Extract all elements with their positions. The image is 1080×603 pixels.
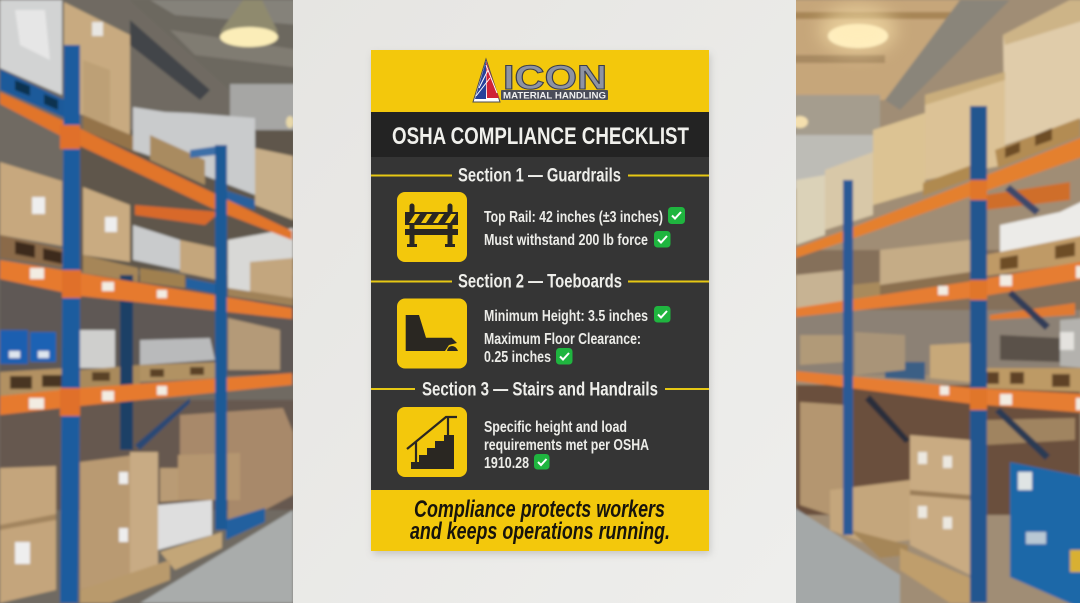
third tier goods (978, 368, 1080, 392)
second tier boxes (0, 162, 62, 246)
uprights (843, 180, 853, 535)
check badge (556, 348, 572, 364)
section 3 checklist (484, 419, 649, 472)
check badge (668, 207, 685, 224)
shelf tags (1000, 275, 1012, 286)
section 2 checklist: Maximum Floor Clearance: (484, 331, 641, 348)
icon: toeboard (397, 298, 467, 368)
section 2 checklist: 0.25 inches (484, 349, 551, 366)
background: blurred warehouse left (0, 0, 300, 603)
background: blurred warehouse right (790, 0, 1080, 603)
section 3 heading: Section 3 — Stairs and Handrails (422, 380, 658, 400)
footer banner (371, 490, 709, 551)
section 2 checklist (484, 306, 670, 366)
check badge (534, 454, 550, 470)
bottom goods (800, 402, 845, 520)
section 2 checklist: Minimum Height: 3.5 inches (484, 308, 648, 325)
poster (371, 50, 709, 551)
icon: barricade (397, 192, 467, 262)
title band: OSHA COMPLIANCE CHECKLIST (392, 123, 689, 150)
middle goods (1000, 200, 1080, 258)
section 1 checklist: Must withstand 200 lb force (484, 232, 648, 249)
shelves (796, 136, 1080, 258)
section 3 checklist: requirements met per OSHA (484, 437, 649, 454)
footer banner: Compliance protects workers (414, 496, 665, 523)
section 2 heading: Section 2 — Toeboards (458, 272, 622, 292)
white wall panel (293, 0, 796, 603)
third tier goods (0, 330, 28, 364)
check badge (654, 231, 670, 248)
section 3 checklist: Specific height and load (484, 419, 627, 436)
logo wordmark: MATERIAL HANDLING (503, 90, 606, 100)
section 1 heading: Section 1 — Guardrails (458, 166, 621, 186)
check badge (654, 306, 670, 322)
poster dark body (371, 112, 709, 490)
ceiling lamp (220, 0, 278, 32)
ceiling lamp (828, 24, 888, 48)
poster shadow (373, 54, 710, 554)
top boxes (1002, 20, 1080, 146)
section 1 checklist (484, 207, 685, 249)
logo: Icon Material Handling (473, 59, 608, 102)
section 1 checklist: Top Rail: 42 inches (±3 inches) (484, 209, 663, 226)
poster yellow header (371, 50, 709, 112)
shelf tags (30, 268, 44, 279)
logo tower emblem (473, 59, 500, 102)
title band (371, 112, 709, 157)
blue machine (1010, 462, 1080, 603)
section 3 checklist: 1910.28 (484, 455, 529, 472)
braces and back uprights (120, 275, 133, 450)
uprights (215, 145, 227, 530)
logo wordmark: ICON (503, 59, 607, 97)
top-left white pallet stack (0, 0, 62, 95)
bottom tier boxes (0, 466, 56, 603)
box labels (32, 197, 45, 214)
icon: stairs with handrail (397, 407, 467, 477)
shelves (0, 92, 292, 240)
footer banner: and keeps operations running. (410, 518, 670, 545)
